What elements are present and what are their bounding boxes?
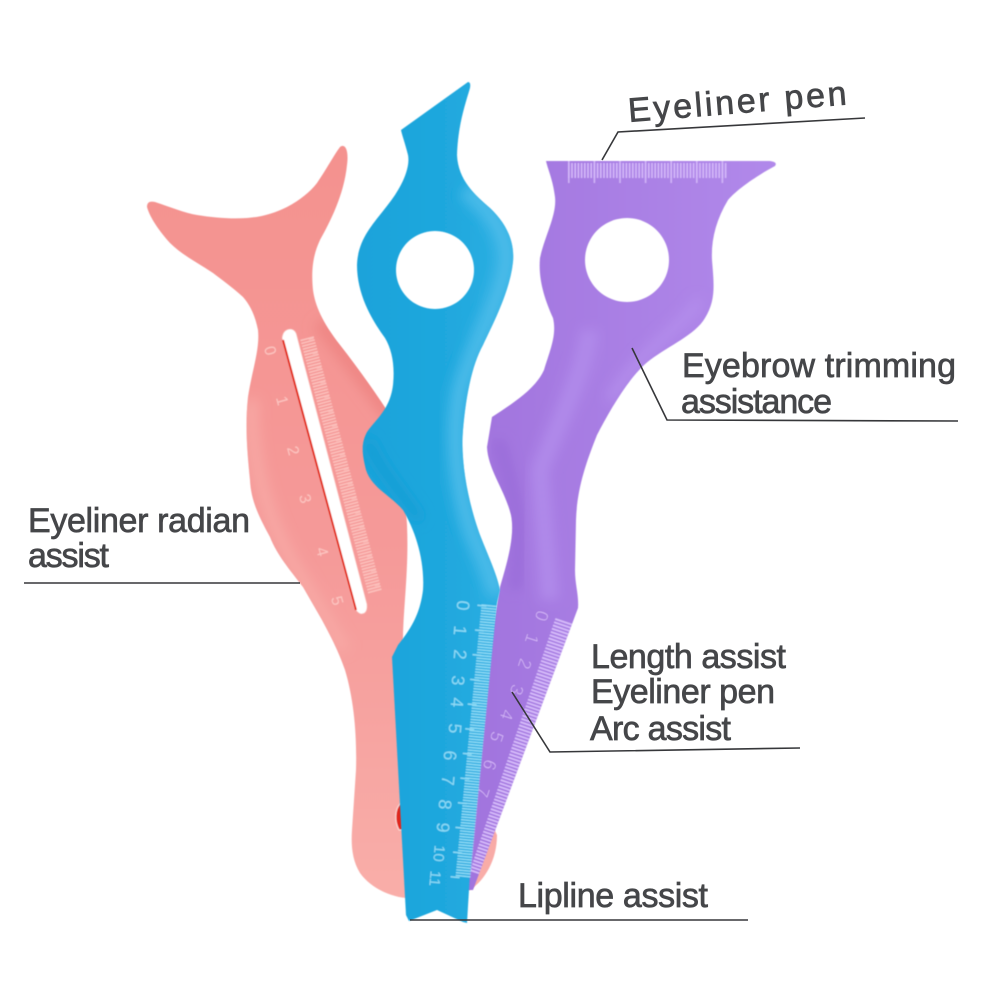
purple top ruler ticks <box>568 170 728 172</box>
callout: Length assist, Eyeliner pen, Arc assist <box>512 638 800 752</box>
purple ruler numbers: 2 <box>514 656 536 672</box>
purple ruler numbers: 3 <box>506 682 528 698</box>
blue ruler numbers <box>425 600 473 887</box>
purple ruler numbers: 6 <box>479 757 501 773</box>
blue ruler ticks <box>455 605 489 878</box>
tool: purple stencil <box>450 161 776 890</box>
pink ruler numbers: 1 <box>272 394 291 407</box>
purple ruler numbers: 0 <box>531 608 553 624</box>
pink ruler numbers: 3 <box>295 492 314 505</box>
blue ruler numbers: 6 <box>440 750 460 761</box>
purple ruler numbers: 1 <box>521 631 543 647</box>
callout: Eyebrow trimming assistance: Eyebrow trimming <box>682 347 956 385</box>
pink ruler numbers <box>260 344 346 607</box>
blue ruler numbers: 10 <box>429 844 448 862</box>
blue ruler numbers: 4 <box>447 697 467 708</box>
callout: Eyeliner pen: Eyeliner pen <box>627 75 848 130</box>
infographic: eyeliner stencil tools <box>24 81 958 924</box>
tool: blue stencil <box>357 82 513 923</box>
blue ruler numbers: 8 <box>435 799 455 810</box>
purple ruler numbers: 5 <box>486 729 508 745</box>
purple ruler numbers <box>472 608 553 800</box>
callout: Lipline assist: Lipline assist <box>518 877 709 915</box>
callout: Length assist, Eyeliner pen, Arc assist: Arc assist <box>590 710 732 748</box>
callout: Length assist, Eyeliner pen, Arc assist: Eyeliner pen <box>591 673 775 711</box>
pink slot <box>282 329 367 614</box>
blue ruler numbers: 7 <box>438 775 458 786</box>
pink lower hole <box>396 804 403 830</box>
callout: Eyeliner radian assist: Eyeliner radian <box>28 502 250 540</box>
pink ruler ticks <box>307 338 379 592</box>
callout: Eyeliner pen <box>602 75 865 160</box>
pink ruler numbers: 5 <box>327 594 346 607</box>
blue ruler numbers: 0 <box>453 600 473 611</box>
callout: Eyebrow trimming assistance <box>632 347 958 421</box>
blue ruler numbers: 5 <box>445 723 465 734</box>
blue ruler numbers: 1 <box>450 625 470 636</box>
pink ruler numbers: 2 <box>283 444 302 457</box>
purple ruler numbers: 4 <box>496 707 518 723</box>
purple side ruler ticks <box>478 621 564 875</box>
pink ruler numbers: 4 <box>312 545 331 558</box>
callout: Eyeliner radian assist <box>24 502 300 583</box>
blue ruler numbers: 11 <box>425 870 444 887</box>
blue ruler numbers: 9 <box>433 822 453 833</box>
pink ruler numbers: 0 <box>260 344 279 357</box>
callout: Eyebrow trimming assistance: assistance <box>681 383 832 421</box>
callout: Length assist, Eyeliner pen, Arc assist: Length assist <box>591 638 787 676</box>
blue ruler numbers: 2 <box>450 649 470 660</box>
purple ruler numbers: 7 <box>472 784 494 800</box>
tool: pink stencil <box>147 146 497 898</box>
callout: Eyeliner radian assist: assist <box>28 537 110 575</box>
blue ruler numbers: 3 <box>448 675 468 686</box>
